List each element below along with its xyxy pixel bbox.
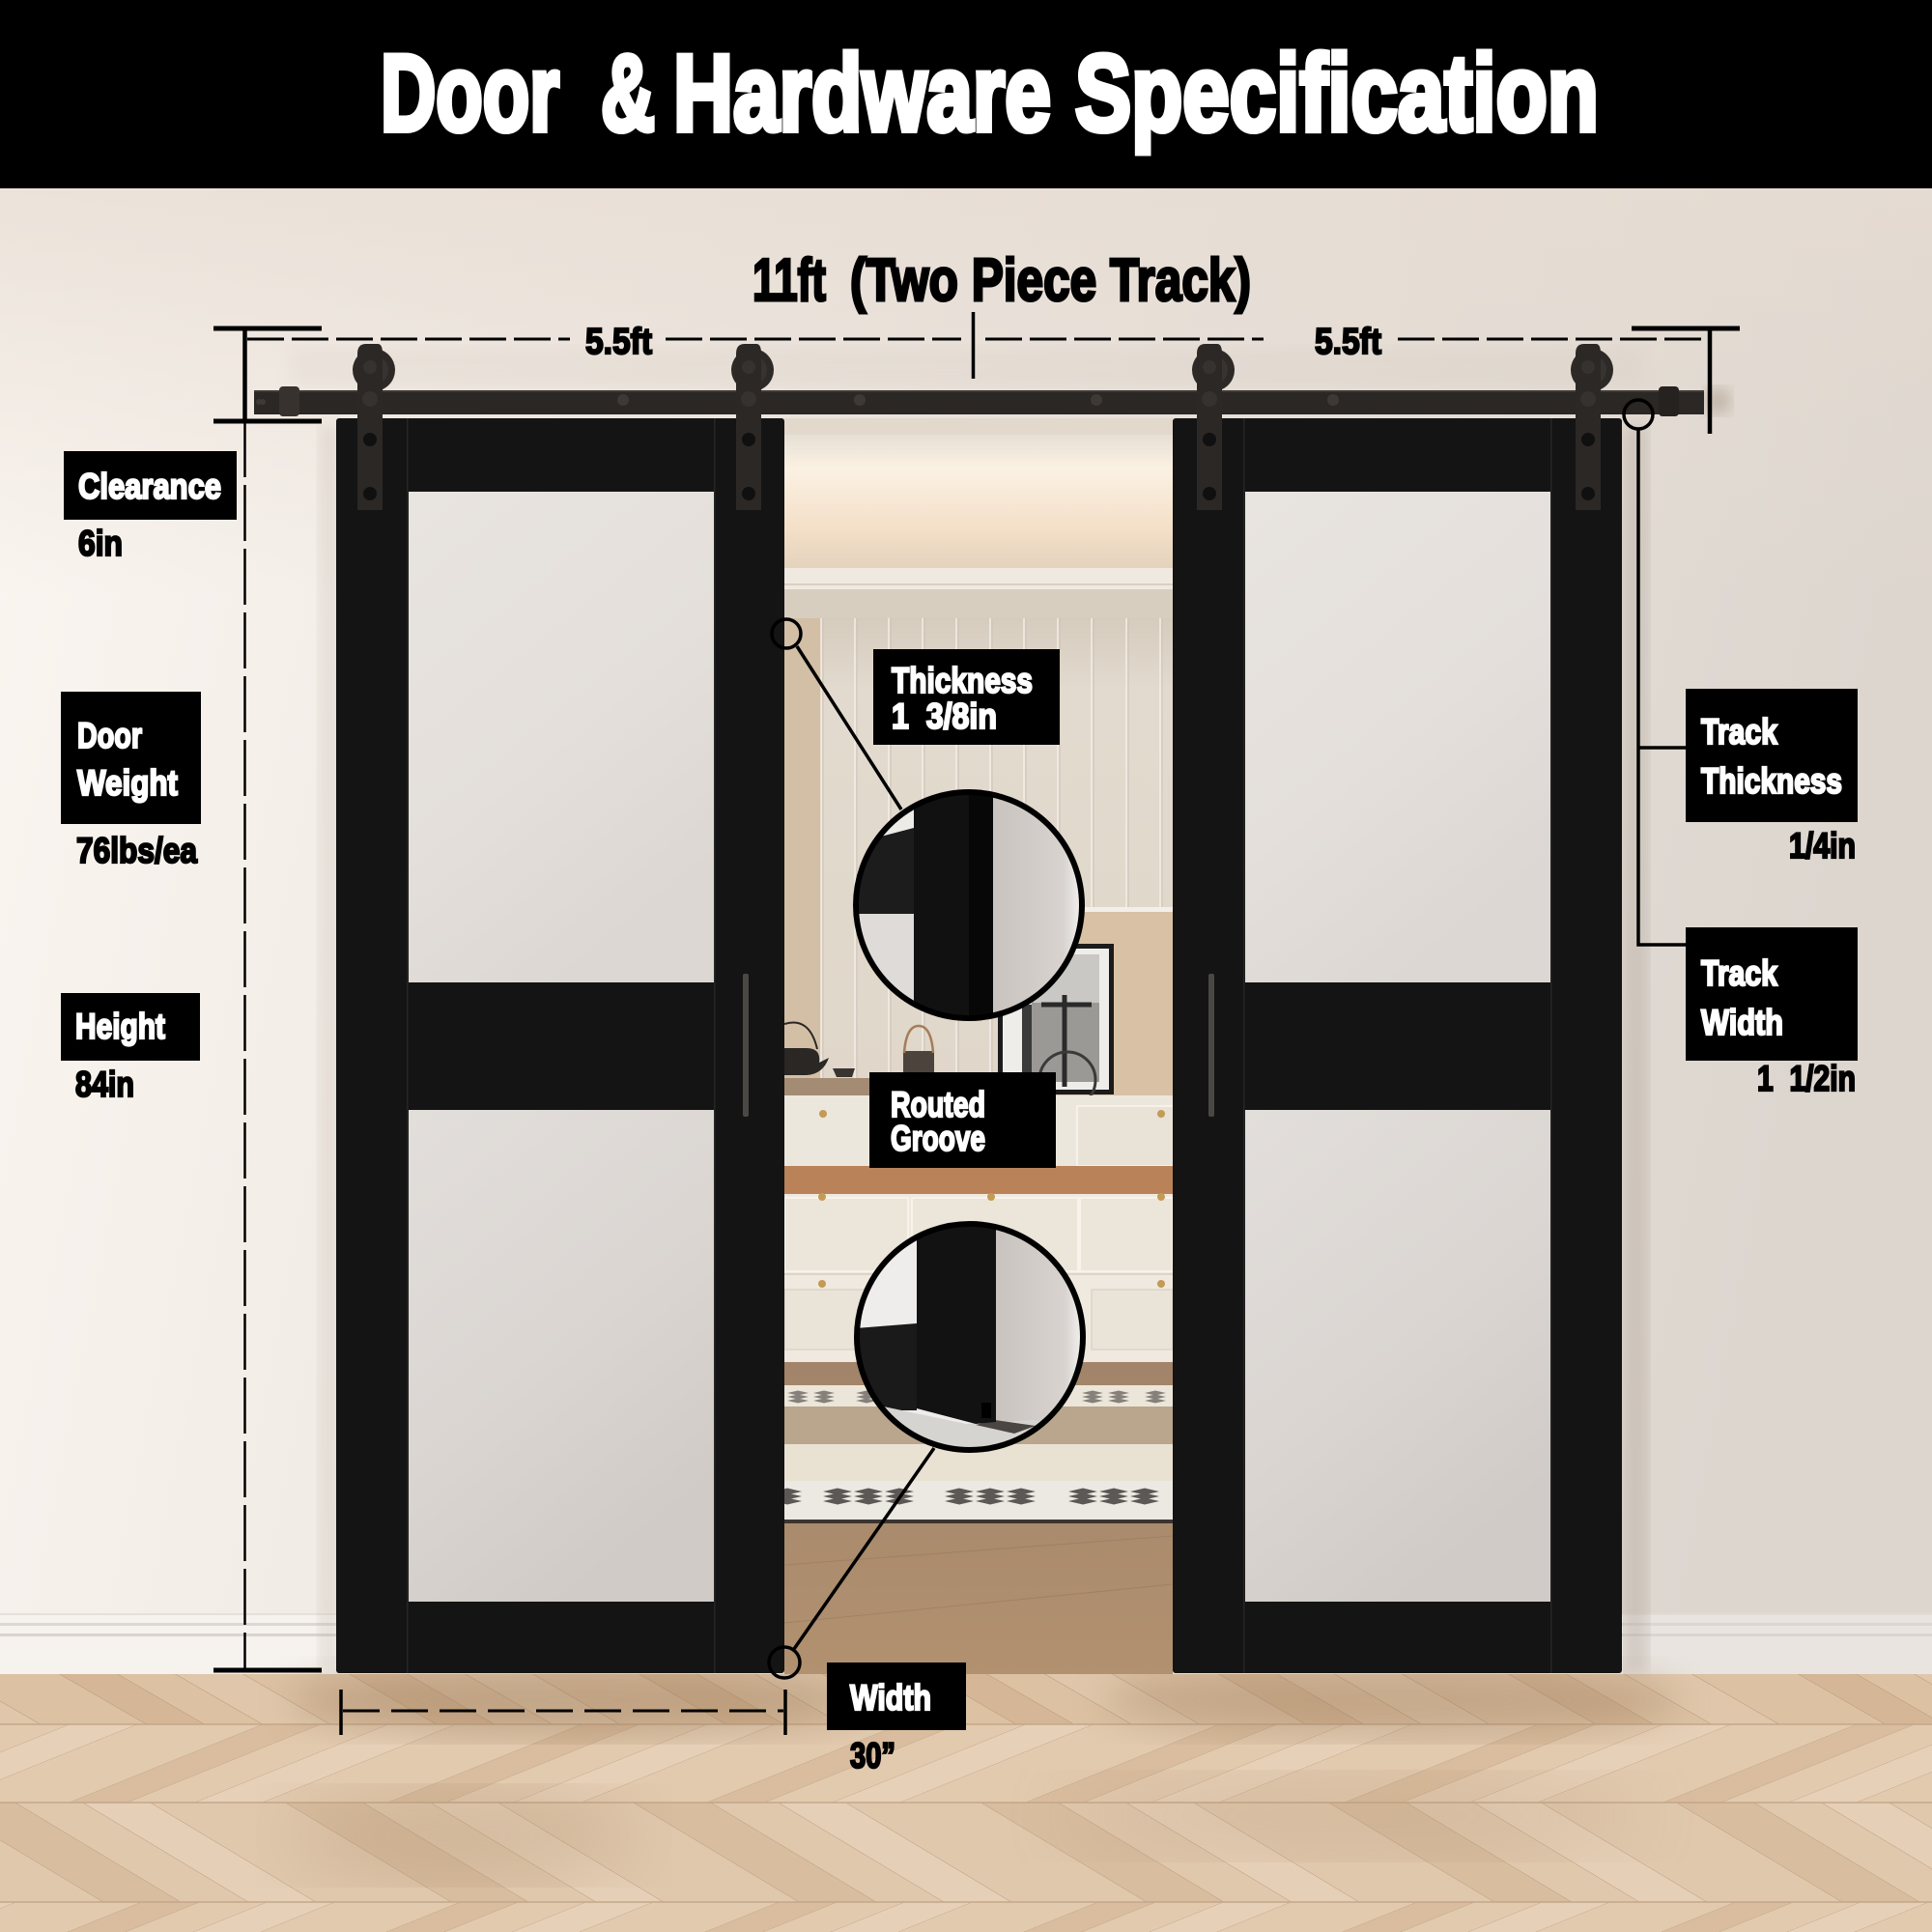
title: &	[601, 33, 655, 154]
label: clearance: Clearance	[78, 467, 221, 506]
label: door weight: Door	[77, 716, 142, 755]
dimension: height dashed line	[213, 421, 322, 1670]
label: track width: Width	[1701, 1003, 1783, 1042]
backsplash	[1056, 912, 1173, 1095]
label: height: Height	[75, 1007, 165, 1046]
header bar	[0, 0, 1932, 188]
label: width	[827, 1662, 966, 1776]
label: routed groove: Groove	[891, 1119, 985, 1158]
door handle	[743, 974, 749, 1117]
label: door weight: 76lbs/ea	[76, 831, 197, 870]
label: door weight: Weight	[77, 763, 178, 803]
wall background	[0, 188, 1932, 1676]
lower glass pane	[1245, 1110, 1550, 1602]
callout: thickness leader	[772, 619, 901, 810]
label: height	[61, 993, 200, 1104]
kitchen scene through the opening	[773, 418, 1174, 1674]
label: door weight	[61, 692, 201, 870]
label: track thickness: Track	[1701, 712, 1777, 752]
track total length label: (Two Piece Track)	[850, 247, 1251, 314]
title	[381, 33, 1599, 154]
label: track width: Track	[1701, 953, 1777, 993]
callout: track leader lines	[1624, 400, 1686, 945]
teapots and tray	[784, 1022, 934, 1095]
baseboard	[0, 1613, 1932, 1674]
magnifier: door thickness detail	[855, 791, 1087, 1020]
track stoppers	[279, 386, 1679, 416]
label: track thickness: Thickness	[1701, 761, 1842, 801]
label: track thickness: 1/4in	[1789, 826, 1856, 866]
crown moulding	[784, 568, 1173, 620]
left door	[336, 418, 784, 1673]
interior floor	[784, 1362, 1173, 1674]
right half length: 5.5ft	[1315, 322, 1381, 362]
label: clearance: 6in	[78, 524, 123, 563]
title: Door	[381, 33, 559, 154]
label: door thickness: Thickness	[892, 661, 1033, 700]
patterned rug	[773, 1385, 1173, 1523]
dimension: track length, dashed with brackets	[213, 312, 1740, 434]
soffit	[784, 435, 1173, 570]
right door	[1173, 418, 1622, 1673]
wooden counter	[784, 1166, 1173, 1195]
magnifier: routed groove detail	[856, 1223, 1088, 1451]
label: clearance	[64, 451, 237, 563]
track total length label: 11ft	[753, 247, 826, 314]
label: width: Width	[850, 1678, 931, 1718]
label: track width: 1 1/2in	[1757, 1059, 1856, 1098]
title: Hardware	[673, 33, 1051, 154]
barn door hangers	[353, 344, 1613, 510]
label: routed groove	[869, 1072, 1056, 1168]
label: door thickness: 1 3/8in	[892, 696, 997, 736]
track total length label	[753, 247, 1251, 314]
label: door thickness	[873, 649, 1060, 745]
floor: chevron planks	[0, 1663, 1932, 1932]
wainscot wall panels	[784, 618, 1173, 1096]
title: Specification	[1075, 33, 1599, 154]
label: height: 84in	[75, 1065, 134, 1104]
label: track thickness	[1686, 689, 1858, 866]
lower glass pane	[409, 1110, 714, 1602]
upper glass pane	[409, 492, 714, 982]
left half length: 5.5ft	[585, 322, 652, 362]
door handle	[1208, 974, 1214, 1117]
upper glass pane	[1245, 492, 1550, 982]
framed bicycle photo	[998, 944, 1114, 1108]
sliding track	[254, 386, 1704, 416]
callout: groove leader	[769, 1448, 934, 1678]
label: width: 30”	[850, 1736, 895, 1776]
lower cabinets	[784, 1193, 1173, 1363]
upper cabinets	[784, 1095, 1174, 1167]
track bolts	[256, 394, 1339, 406]
label: routed groove: Routed	[891, 1085, 985, 1124]
dimension: door width	[341, 1690, 785, 1735]
door shadows on wall	[290, 348, 1731, 1671]
label: track width	[1686, 927, 1858, 1098]
